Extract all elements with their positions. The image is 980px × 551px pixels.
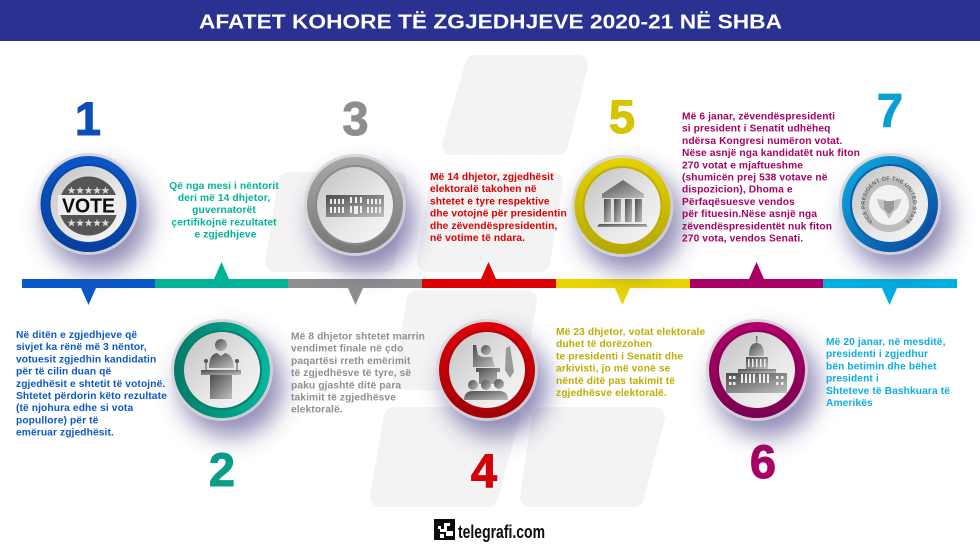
step 7: number: 7 [877, 84, 903, 137]
step 7: vice-presidential seal badge: VICE PRESIDENT OF THE UNITED STATES [861, 176, 917, 225]
step 3: text: vendimet finale në çdo [291, 344, 403, 355]
step 1: text: Shtetet përdorin këto rezultate [16, 391, 167, 402]
step 4: text: dhe votojnë për presidentin [430, 209, 567, 220]
step 2: text: Që nga mesi i nëntorit [169, 181, 279, 192]
step 4: text: dhe zëvendëspresidentin, [430, 221, 557, 232]
step 5: number: 5 [609, 90, 635, 143]
step 5: text: zgjedhësve elektoralë. [556, 388, 667, 399]
step 3: number: 3 [342, 92, 369, 145]
step 6: text: 270 vota, vendos Senati. [682, 233, 803, 244]
step 2: text: guvernatorët [192, 205, 256, 216]
step 2: number: 2 [209, 443, 235, 496]
step 7: text: Më 20 janar, në mesditë, [826, 337, 946, 348]
step 6: text: Përfaqësuesve vendos [682, 197, 795, 208]
step 3: white house badge [304, 154, 416, 272]
step 4: number: 4 [471, 444, 497, 497]
step 2: text: çertifikojnë rezultatet [171, 217, 277, 228]
step 7: text: president i [826, 374, 879, 385]
step 4: text: shtetet e tyre respektive [430, 196, 550, 207]
step 5: text: Më 23 dhjetor, votat elektorale [556, 327, 705, 338]
step 6: capitol badge [706, 319, 818, 437]
step 4: text: Më 14 dhjetor, zgjedhësit [430, 172, 554, 183]
step 1: text: zgjedhësit e shtetit të votojnë. [16, 379, 165, 390]
step 1: number: 1 [75, 92, 101, 145]
step 1: vote badge: ★★★★★ [68, 218, 110, 228]
logo: telegrafi.com [434, 519, 545, 542]
step 1: vote badge: VOTE [62, 196, 115, 218]
step 6: text: (shumicën prej 538 votave në [682, 172, 828, 184]
step 1: text: popullore) për të [16, 415, 99, 426]
step 1: text: për të cilin duan që [16, 367, 111, 378]
step 1: text: sivjet ka rënë më 3 nëntor, [16, 342, 147, 353]
step 4: text: në votime të ndara. [430, 233, 525, 244]
header band [0, 0, 980, 41]
step 1: vote badge: ★★★★★ [68, 186, 110, 196]
step 2: text: e zgjedhjeve [194, 229, 257, 240]
step 3: text: të zgjedhësve të tyre, së [291, 368, 411, 379]
logo: telegrafi.com: telegrafi.com [458, 521, 545, 542]
step 6: text: Nëse asnjë nga kandidatët nuk fiton [682, 148, 860, 159]
step 5: text: arkivisti, jo më vonë se [556, 364, 671, 375]
step 3: text: paku gjashtë ditë para [291, 380, 401, 391]
step 3: text: takimit të zgjedhësve [291, 392, 396, 404]
step 5: text: nëntë ditë pas takimit të [556, 376, 675, 387]
step 6: text: për fituesin.Nëse asnjë nga [682, 209, 817, 220]
background shapes [275, 65, 655, 497]
step 1: text: votuesit zgjedhin kandidatin [16, 354, 156, 365]
step 1: text: Në ditën e zgjedhjeve që [16, 330, 137, 341]
step 2: text: deri më 14 dhjetor, [178, 193, 270, 204]
step 2: speaker icon badge [171, 319, 283, 437]
step 6: text: zëvendëspresidentët nuk fiton [682, 221, 832, 232]
step 7: text: bën betimin dhe bëhet [826, 361, 937, 372]
title: AFATET KOHORE TË ZGJEDHJEVE 2020-21 NË SHBA [199, 10, 782, 34]
step 5: text: duhet të dorëzohen [556, 339, 652, 350]
step 1: vote badge [38, 153, 149, 271]
step 1: text: (të njohura edhe si vota [16, 403, 133, 414]
step 6: number: 6 [750, 435, 776, 488]
step 3: text: paqartësi rreth emërimit [291, 356, 411, 367]
step 3: text: elektoralë. [291, 405, 343, 416]
step 7: text: presidenti i zgjedhur [826, 349, 928, 360]
step 6: text: dispozicion), Dhoma e [682, 185, 793, 196]
step 7: text: Amerikës [826, 398, 873, 409]
step 1: text: emëruar zgjedhësit. [16, 428, 114, 439]
step 6: text: ndërsa Kongresi numëron votat. [682, 136, 842, 147]
step 3: text: Më 8 dhjetor shtetet marrin [291, 332, 425, 342]
step 5: institution badge [572, 155, 683, 273]
step 6: text: 270 votat e mjaftueshme [682, 160, 803, 171]
timeline bar [22, 262, 957, 305]
step 5: text: te presidenti i Senatit dhe [556, 351, 683, 362]
step 4: orator badge [436, 319, 548, 437]
step 6: text: si president i Senatit udhëheq [682, 124, 831, 135]
step 4: text: elektoralë takohen në [430, 184, 537, 195]
step 7: vice-presidential seal badge [832, 152, 966, 283]
step 7: text: Shteteve të Bashkuara të [826, 386, 950, 397]
step 6: text: Më 6 janar, zëvendëspresidenti [682, 112, 835, 122]
